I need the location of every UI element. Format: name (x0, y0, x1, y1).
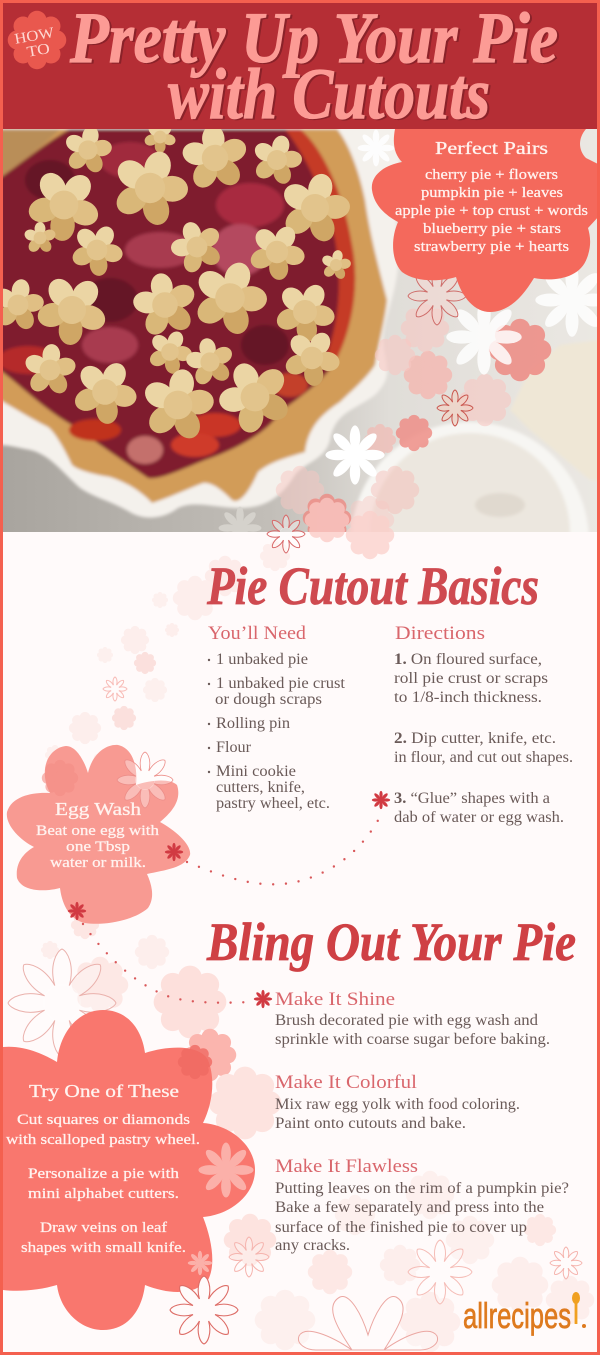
text block: directions: 2. Dip cutter, knife, etc. (394, 730, 556, 747)
flour bowl (353, 422, 588, 532)
panel: egg wash: water or milk. (50, 855, 146, 871)
text block: you'll need: Flour (216, 739, 252, 756)
text block: make it colorful: Paint onto cutouts and bake. (275, 1115, 466, 1132)
text block: make it colorful: Mix raw egg yolk with food coloring. (275, 1096, 520, 1113)
panel: try one of these: with scalloped pastry wheel. (6, 1132, 200, 1148)
panel: perfect pairs: apple pie + top crust + words (395, 203, 588, 219)
heading: pie cutout basics: Pie Cutout Basics (206, 556, 539, 616)
text block: directions: 1. On floured surface, (394, 651, 542, 668)
icon: how-to flower badge: TO (26, 41, 51, 61)
flower fragments below the photo (267, 498, 394, 559)
arrow: dotted path from egg wash to step 3 (165, 791, 390, 884)
text block: make it shine: Make It Shine (275, 989, 395, 1010)
text block: make it flawless (275, 1156, 569, 1254)
text block: directions: roll pie crust or scraps (394, 670, 548, 687)
text block: make it shine (275, 989, 550, 1048)
panel: try one of these: shapes with small knife. (21, 1240, 186, 1256)
panel: try one of these: Draw veins on leaf (40, 1220, 167, 1236)
text block: you'll need: Mini cookie (216, 763, 296, 780)
panel: egg wash (7, 745, 190, 924)
text block: make it flawless: surface of the finished pie to cover up (275, 1219, 527, 1236)
text block: make it shine: sprinkle with coarse sugar before baking. (275, 1031, 550, 1048)
panel: try one of these: Personalize a pie with (28, 1166, 180, 1182)
text block: make it colorful: Make It Colorful (275, 1072, 417, 1093)
panel: perfect pairs: cherry pie + flowers (425, 167, 558, 183)
title: with Cutouts (168, 54, 490, 134)
panel: perfect pairs: blueberry pie + stars (423, 221, 561, 237)
text block: directions (394, 623, 573, 826)
text block: you'll need: 1 unbaked pie (216, 651, 308, 668)
text block: you'll need: You’ll Need (208, 623, 307, 644)
text block: you'll need: or dough scraps (215, 691, 322, 708)
outline flowers (8, 677, 582, 1350)
text block: directions: 3. “Glue” shapes with a (394, 790, 550, 807)
pie photo (3, 129, 597, 532)
text block: directions: Directions (395, 623, 485, 644)
text block: make it flawless: Bake a few separately and press into the (275, 1199, 544, 1216)
panel: perfect pairs (372, 129, 600, 312)
panel: try one of these: mini alphabet cutters. (28, 1186, 179, 1202)
panel: perfect pairs: strawberry pie + hearts (414, 239, 569, 255)
panel: try one of these: Cut squares or diamonds (17, 1112, 190, 1128)
panel: title banner (0, 0, 600, 134)
text block: make it flawless: Make It Flawless (275, 1156, 418, 1177)
panel: egg wash: Beat one egg with (36, 823, 160, 839)
icon: how-to flower badge (8, 11, 66, 69)
text block: make it colorful (275, 1072, 520, 1132)
text block: you'll need (208, 623, 346, 812)
text block: you'll need: Rolling pin (216, 715, 290, 732)
panel: egg wash: one Tbsp (66, 839, 130, 855)
panel: try one of these (3, 1010, 255, 1330)
panel: perfect pairs: pumpkin pie + leaves (421, 185, 563, 201)
text block: directions: in flour, and cut out shapes. (394, 749, 573, 766)
arrow: dotted path from egg wash to make it shine (68, 902, 272, 1008)
text block: directions: dab of water or egg wash. (394, 809, 564, 826)
icon: how-to flower badge: HOW (13, 25, 56, 48)
text block: make it shine: Brush decorated pie with egg wash and (275, 1012, 538, 1029)
photo flower overlays (219, 130, 600, 549)
text block: make it flawless: any cracks. (275, 1237, 350, 1254)
text block: you'll need: 1 unbaked pie crust (216, 675, 346, 692)
panel: perfect pairs: Perfect Pairs (435, 138, 548, 158)
text block: make it flawless: Putting leaves on the rim of a pumpkin pie? (275, 1180, 569, 1197)
icon: white outline flower (170, 1276, 238, 1344)
text block: you'll need: cutters, knife, (216, 779, 305, 796)
text block: you'll need: pastry wheel, etc. (216, 795, 330, 812)
text block: directions: to 1/8-inch thickness. (394, 689, 542, 706)
panel: egg wash: Egg Wash (55, 799, 141, 819)
title (69, 0, 558, 134)
panel: try one of these: Try One of These (29, 1081, 179, 1101)
pale flower trail background (41, 541, 594, 1352)
